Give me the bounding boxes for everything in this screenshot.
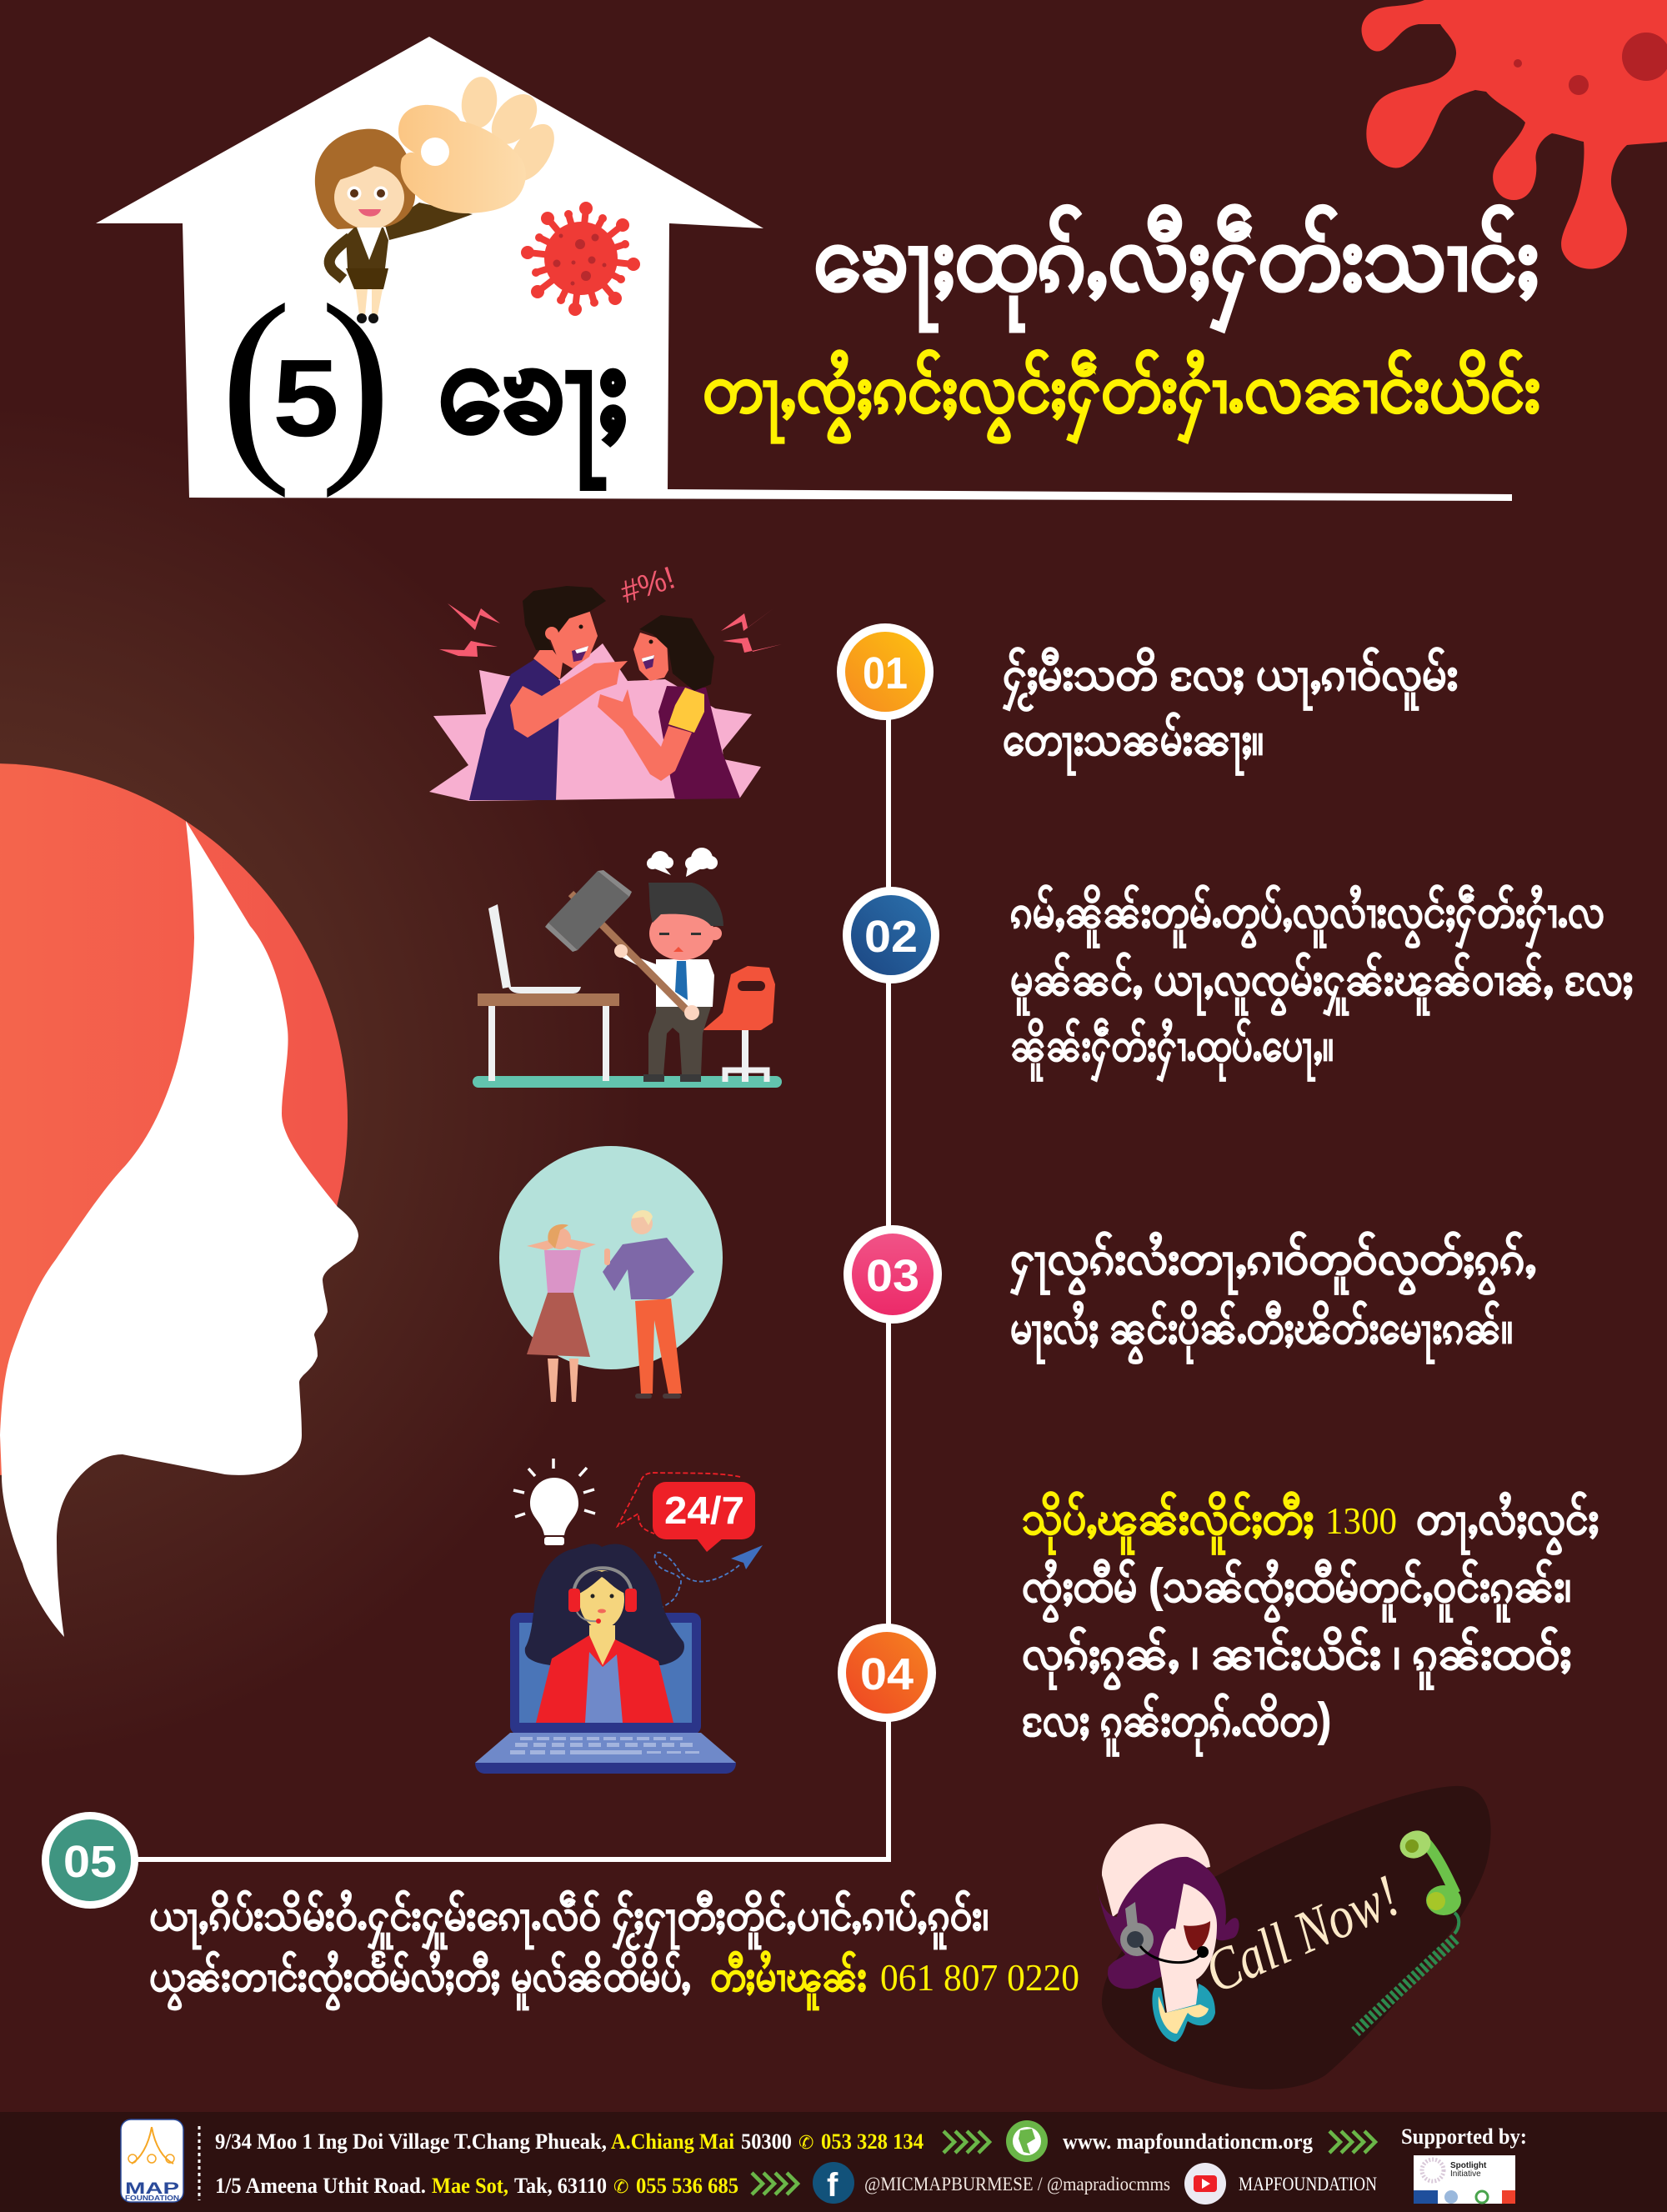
step 04 text: တႃႇလႆႈလွင်ႈ (1416, 1491, 1599, 1554)
address line 1: 9/34 Moo 1 Ing Doi Village T.Chang Phueak, (215, 2129, 607, 2154)
icon: youtube (1184, 2163, 1226, 2204)
panel: white house header (96, 37, 1512, 501)
social handles: @MICMAPBURMESE / @mapradiocmms (864, 2174, 1170, 2194)
step 04 badge: 04 (860, 1649, 914, 1699)
speech bubble 24/7: 24/7 (664, 1489, 744, 1532)
speech bubble 24/7 (618, 1473, 755, 1552)
step 03 text: ႁႃလွၵ်းလႆးတႃႇၵၢဝ်တူဝ်လွတ်ႈၵွၵ်ႇ (1010, 1231, 1536, 1295)
icon: anger puffs (647, 848, 718, 877)
step 01 text (1003, 647, 1458, 775)
address line 2: Tak, 63110 (514, 2174, 607, 2198)
step 01 badge: 01 (863, 648, 908, 698)
heading: five-points word: ၶေႃႈ (438, 313, 628, 490)
step 02 badge (843, 887, 939, 983)
title: ၶေႃႈထုၵ်ႇလီႈႁဵတ်းသၢင်ႈ (813, 205, 1539, 333)
step 05 badge: 05 (63, 1837, 117, 1887)
website: www. mapfoundationcm.org (1063, 2129, 1313, 2154)
address line 1: 053 328 134 (821, 2129, 924, 2154)
youtube handle: MAPFOUNDATION (1239, 2174, 1377, 2194)
logo: MAP Foundation (121, 2119, 183, 2202)
icon: facebook (813, 2162, 854, 2204)
address line 1: ✆ (798, 2133, 813, 2154)
step 04 text: လုၵ်ႈၵွၼ်ႇ ၊ ၼၢင်းယိင်း ၊ ၵူၼ်းထဝ်ႈ (1022, 1626, 1571, 1689)
step 03 badge: 03 (866, 1251, 919, 1301)
illustration: 24/7 helpline agent (475, 1459, 763, 1774)
address line 2: 1/5 Ameena Uthit Road. (215, 2174, 426, 2198)
step 01 badge (837, 623, 934, 720)
icon: globe (1006, 2120, 1048, 2162)
icon: facebook: f (827, 2167, 839, 2204)
step 03 text (1010, 1231, 1536, 1364)
address line 1: 50300 (741, 2129, 792, 2154)
address line 2 (215, 2174, 738, 2198)
step 02 badge: 02 (864, 912, 918, 962)
panel: footer bar (0, 2112, 1667, 2212)
address line 2: Mae Sot, (432, 2174, 508, 2198)
step 02 text (1010, 884, 1633, 1082)
heading: (5): ( (220, 260, 292, 498)
illustration: couple quarrel in circle (499, 1146, 723, 1402)
address line 1: A.Chiang Mai (611, 2129, 734, 2154)
step 04 badge (838, 1624, 936, 1722)
step 02 text: ၼိူၼ်းႁဵတ်းႁၢႆႉထုပ်ႉပေႃႇ။ (1010, 1018, 1334, 1082)
woman silhouette (0, 763, 358, 1637)
step 01 text: ႁႂ်ႈမီးသတိ လႄႈ ယႃႇၵၢဝ်လူမ်း (1003, 647, 1458, 711)
icon: red virus splat corner (1362, 0, 1667, 269)
step 03 badge (844, 1225, 942, 1324)
icon: businesswoman with OK hand (315, 74, 563, 323)
step 05 text: 061 807 0220 (880, 1956, 1079, 1999)
step 05 badge (42, 1812, 138, 1909)
logo: spotlight initiative (1414, 2155, 1515, 2204)
heading: (5): ) (320, 260, 392, 498)
icon: paper plane (655, 1545, 763, 1607)
background glow (0, 333, 750, 1917)
step 05 text: တီႈမၢႆၽူၼ်း (710, 1951, 867, 2010)
step 05 text: ယႃႇၵိပ်းသိမ်းဝႆႉႁူင်းႁူမ်းၵေႃႉလဵဝ် ႁႂ်ႈႁႃတီႈတိူင်ႇပၢင်ႇၵၢပ်ႇၵူဝ်း၊ (149, 1890, 989, 1949)
call now lettering: Call Now! (1195, 1862, 1409, 2006)
step 01 text: တေႃးသၼမ်းၼႃႈ။ (1003, 712, 1264, 775)
step 04 text: လႄႈ ၵူၼ်းတုၵ်ႉၸိတ) (1022, 1693, 1331, 1756)
address line 1 (215, 2129, 924, 2154)
step 05 text (149, 1890, 1079, 2010)
address line 2: 055 536 685 (636, 2174, 738, 2198)
address line 2: ✆ (613, 2177, 628, 2198)
illustration: call now operator (1097, 1786, 1491, 2089)
logo: spotlight initiative: Initiative (1450, 2169, 1481, 2179)
step 04 text (1022, 1491, 1599, 1756)
step 04 text: 1300 (1325, 1499, 1397, 1542)
icon: light bulb (513, 1459, 595, 1545)
step 05 text: ယွၼ်းတၢင်းၸွႆးထႅမ်လႆႈတီႈ မူလ်ၼိထိမိပ်ႇ (149, 1951, 691, 2010)
supported by label: Supported by: (1401, 2124, 1527, 2149)
exclamation symbols: #%! (617, 560, 679, 611)
icon: chevrons (752, 2131, 1375, 2194)
heading: (5): 5 (273, 337, 339, 459)
logo: MAP Foundation: MAP (125, 2180, 179, 2198)
illustration: couple arguing (429, 560, 782, 801)
timeline connector (133, 717, 889, 1859)
step 04 text: ၸွႆႈထီမ် (သၼ်ၸွႆႈထီမ်တူင်ႇဝူင်းၵူၼ်း၊ (1022, 1559, 1571, 1622)
illustration: angry man with hammer (473, 848, 782, 1088)
logo: spotlight initiative: Spotlight (1450, 2161, 1487, 2170)
step 03 text: မႃးလႆႈ ၼွင်းပိုၼ်ႉတီႈၽိတ်းမေႃးၵၼ်။ (1010, 1300, 1513, 1364)
logo: MAP Foundation: FOUNDATION (125, 2194, 179, 2202)
step 04 text: သိုပ်ႇၽူၼ်းလိူင်ႈတီႈ (1022, 1491, 1314, 1554)
laptop keyboard (510, 1737, 699, 1754)
icon: coronavirus (521, 202, 640, 316)
icon: green telephone (1355, 1825, 1461, 2032)
heading: (5) (220, 260, 392, 498)
subtitle: တႃႇၸွႆႈၵင်ႈလွင်ႈႁဵတ်းႁၢႆႉလၼၢင်းယိင်း (703, 349, 1540, 443)
